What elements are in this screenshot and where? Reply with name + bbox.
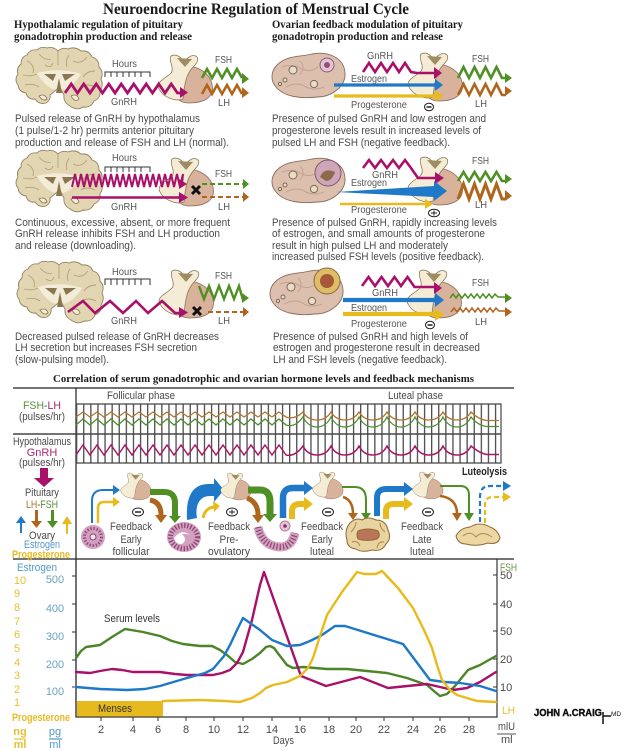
FSH dashed arrow bbox=[202, 179, 249, 189]
panel: normal GnRH pulse bbox=[16, 47, 249, 109]
FSH pulses bbox=[458, 67, 512, 83]
arrow: progesterone bbox=[203, 507, 214, 518]
day axis labels: 4 bbox=[130, 724, 136, 736]
day axis labels: 18 bbox=[323, 724, 335, 736]
text: high levels: estrogen and progesterone result in decreased bbox=[273, 342, 480, 354]
day axis labels: 24 bbox=[407, 724, 419, 736]
left labels: hormone flow: Estrogen bbox=[24, 539, 60, 551]
progesterone arrow bbox=[343, 308, 444, 321]
day axis labels: 20 bbox=[350, 724, 362, 736]
minus sign bbox=[132, 508, 144, 516]
arrow: LH bbox=[247, 498, 258, 515]
icon: corpus albicans bbox=[456, 524, 500, 545]
panel: continuous GnRH: GnRH bbox=[111, 201, 137, 213]
icon: ovary with follicle bbox=[272, 53, 345, 98]
FSH pulse arrow bbox=[202, 69, 249, 84]
text: continuous bbox=[15, 217, 230, 252]
left axis labels: 8 bbox=[14, 602, 20, 614]
left axis labels: 7 bbox=[14, 616, 20, 628]
day axis labels: 14 bbox=[266, 724, 278, 736]
left axis labels: 1 bbox=[14, 697, 20, 709]
panel: positive feedback: LH bbox=[475, 199, 487, 211]
early follicular phase group: follicular bbox=[112, 546, 150, 558]
progesterone arrow bbox=[340, 199, 433, 209]
text: pulsed release: production and release of FSH and LH (normal). bbox=[15, 137, 229, 149]
day axis labels: 22 bbox=[378, 724, 390, 736]
arrow: FSH bbox=[342, 487, 366, 514]
heading: hypothalamic regulation bbox=[14, 17, 193, 43]
preovulatory phase group bbox=[187, 473, 295, 558]
panel: positive feedback bbox=[272, 155, 512, 217]
panel: slow GnRH pulse: FSH bbox=[215, 270, 232, 282]
icon: brain bbox=[16, 47, 102, 109]
arrow: progesterone bbox=[292, 504, 304, 519]
left labels: hormone flow: Pituitary bbox=[25, 487, 59, 499]
icon: brain bbox=[17, 261, 103, 323]
LH pulses bbox=[458, 84, 512, 96]
panel: continuous GnRH: LH bbox=[218, 201, 230, 213]
arrow: progesterone bbox=[386, 504, 404, 519]
right axis labels: 50 bbox=[500, 626, 512, 638]
text: pulsed release: Pulsed release of GnRH by hypothalamus bbox=[15, 113, 200, 125]
LH pulse arrow bbox=[202, 85, 249, 98]
panel: negative feedback high levels: Progesterone bbox=[351, 318, 407, 330]
GnRH pulses trace bbox=[76, 445, 499, 455]
early follicular phase group: Early bbox=[120, 534, 142, 546]
hours scale: Hours bbox=[112, 58, 137, 70]
panel: continuous GnRH bbox=[16, 150, 249, 213]
icon: pituitary bbox=[408, 53, 462, 101]
LH pulses trace bbox=[76, 412, 499, 420]
panel: positive feedback: GnRH bbox=[372, 169, 398, 181]
FSH reduced pulses bbox=[450, 293, 512, 303]
hours scale bbox=[105, 266, 150, 285]
estrogen arrow bbox=[343, 293, 444, 307]
serum levels chart: Serum levels bbox=[104, 613, 160, 625]
panel: positive feedback: Estrogen bbox=[351, 177, 387, 189]
panel: normal GnRH pulse: GnRH bbox=[111, 96, 137, 108]
left axis labels: 500 bbox=[46, 574, 64, 586]
panel: negative feedback low levels bbox=[272, 50, 512, 111]
FSH increased arrow bbox=[199, 286, 249, 303]
right axis labels: mlU bbox=[498, 721, 515, 733]
text: continuous: and release (downloading). bbox=[15, 240, 136, 252]
minus sign bbox=[422, 508, 434, 516]
arrow: FSH to ovary bbox=[150, 492, 175, 516]
right axis labels: 40 bbox=[500, 599, 512, 611]
text: high levels bbox=[273, 331, 480, 366]
left axis labels: 4 bbox=[14, 657, 20, 669]
text: high levels: LH and FSH levels (negative feedback). bbox=[273, 354, 447, 366]
panel: slow GnRH pulse: GnRH bbox=[111, 315, 137, 327]
LH dashed arrow bbox=[202, 192, 249, 202]
left labels: hormone flow: Ovary bbox=[29, 530, 55, 542]
early luteal phase group: luteal bbox=[310, 546, 334, 558]
left axis labels: pg bbox=[49, 726, 61, 738]
late luteal phase group bbox=[377, 466, 511, 558]
panel: negative feedback high levels: Estrogen bbox=[351, 302, 387, 314]
left axis labels: 300 bbox=[46, 631, 64, 643]
signature bbox=[534, 708, 621, 724]
left axis labels: Estrogen bbox=[17, 562, 57, 574]
late luteal phase group: Feedback bbox=[401, 521, 443, 533]
progesterone arrow bbox=[334, 90, 443, 102]
panel: negative feedback low levels: Estrogen bbox=[351, 73, 387, 85]
menses bar: Menses bbox=[98, 703, 132, 715]
day axis labels: 10 bbox=[208, 724, 220, 736]
arrow: estrogen surge bbox=[187, 478, 224, 520]
icon: pituitary bbox=[121, 473, 151, 500]
arrow: estrogen bbox=[16, 516, 26, 533]
menses bar bbox=[77, 701, 163, 716]
heading: hypothalamic regulation: gonadotrophin production and release bbox=[14, 29, 193, 43]
day axis labels: 26 bbox=[434, 724, 446, 736]
arrow: dashed estrogen bbox=[480, 486, 504, 522]
right axis labels: LH bbox=[502, 705, 515, 717]
hours scale: Hours bbox=[112, 266, 137, 278]
panel: negative feedback low levels: LH bbox=[475, 98, 487, 110]
curve: estrogen bbox=[76, 618, 496, 691]
arrow: LH bbox=[31, 510, 42, 528]
left axis labels: 3 bbox=[14, 670, 20, 682]
right axis labels: 50 bbox=[500, 570, 512, 582]
panel: normal GnRH pulse: FSH bbox=[215, 54, 232, 66]
hours scale bbox=[105, 152, 150, 172]
arrow: progesterone bbox=[62, 516, 72, 534]
icon: ruptured follicle bbox=[258, 521, 295, 547]
pulse grid chart bbox=[76, 404, 502, 463]
FSH pulses trace bbox=[76, 417, 499, 427]
text: decreased pulsed: (slow-pulsing model). bbox=[15, 354, 109, 366]
early follicular phase group: Feedback bbox=[110, 521, 152, 533]
text: low levels: progesterone levels result in increased levels of bbox=[272, 125, 482, 137]
day axis labels: 12 bbox=[237, 724, 249, 736]
left axis labels: 200 bbox=[46, 659, 64, 671]
left labels: pulse rows: (pulses/hr) bbox=[19, 457, 65, 469]
title: Neuroendocrine Regulation of Menstrual Cycle bbox=[103, 1, 409, 18]
left labels: hormone flow: LH-FSH bbox=[26, 499, 58, 511]
icon: brain bbox=[16, 150, 102, 212]
left axis labels: 5 bbox=[14, 643, 20, 655]
icon: primary follicle bbox=[81, 525, 105, 549]
early luteal phase group: Early bbox=[312, 534, 333, 546]
left axis labels: 100 bbox=[46, 686, 64, 698]
heading: ovarian feedback: gonadotropin production and release bbox=[272, 29, 444, 43]
minus sign bbox=[426, 321, 434, 329]
arrow: LH bbox=[343, 497, 353, 514]
phase labels: Luteal phase bbox=[388, 390, 443, 402]
hours scale: Hours bbox=[112, 152, 137, 164]
left labels: pulse rows: Hypothalamus bbox=[13, 436, 71, 448]
late luteal phase group: Late bbox=[412, 534, 432, 546]
icon: ovary with large follicle bbox=[272, 158, 345, 203]
text: continuous: Continuous, excessive, absent, or more frequent bbox=[15, 217, 230, 229]
icon: pituitary bbox=[159, 158, 213, 206]
right axis labels: 20 bbox=[500, 654, 512, 666]
left axis labels: 10 bbox=[14, 575, 26, 587]
left labels: hormone flow bbox=[12, 468, 72, 561]
day axis labels: 28 bbox=[463, 724, 475, 736]
text: decreased pulsed: Decreased pulsed release of GnRH decreases bbox=[15, 331, 219, 343]
curve: progesterone bbox=[163, 571, 496, 702]
text: high levels: Presence of pulsed GnRH and high levels of bbox=[273, 331, 469, 343]
heading: hypothalamic regulation: Hypothalamic regulation of pituitary bbox=[14, 17, 183, 31]
right axis labels bbox=[497, 562, 517, 746]
text: rapid increase bbox=[272, 217, 497, 263]
early luteal phase group bbox=[283, 472, 390, 558]
panel: slow GnRH pulse bbox=[17, 261, 249, 327]
text: rapid increase: increased pulsed FSH levels (positive feedback). bbox=[272, 251, 484, 263]
left labels: pulse rows: GnRH bbox=[27, 447, 57, 459]
arrow: LH to ovary bbox=[150, 500, 161, 515]
text: pulsed release bbox=[15, 113, 229, 149]
arrow: estrogen to pituitary bbox=[92, 490, 114, 523]
right axis labels: FSH bbox=[500, 562, 517, 574]
blocked mark bbox=[193, 307, 201, 315]
day axis labels bbox=[98, 724, 475, 747]
panel: negative feedback high levels bbox=[270, 268, 512, 330]
left axis labels bbox=[12, 562, 70, 750]
late luteal phase group: luteal bbox=[410, 546, 434, 558]
LH dashed arrow bbox=[208, 307, 249, 317]
day axis labels: 8 bbox=[183, 724, 189, 736]
phase labels bbox=[107, 390, 443, 402]
arrow: GnRH to pituitary bbox=[34, 468, 54, 487]
text: low levels bbox=[272, 113, 486, 149]
continuous GnRH arrows bbox=[72, 174, 188, 203]
arrow: FSH bbox=[47, 510, 58, 528]
arrow: estrogen bbox=[283, 488, 304, 518]
late luteal phase group: Luteolysis bbox=[462, 466, 507, 478]
arrow: LH bbox=[440, 496, 457, 514]
arrow: estrogen bbox=[377, 489, 404, 516]
text: decreased pulsed: LH secretion but increases FSH secretion bbox=[15, 342, 197, 354]
hours scale bbox=[105, 58, 150, 77]
text: rapid increase: Presence of pulsed GnRH, rapidly increasing levels bbox=[272, 217, 497, 229]
curve: LH pulse bbox=[76, 572, 496, 690]
heading: ovarian feedback bbox=[272, 17, 463, 43]
curve: FSH bbox=[76, 629, 496, 696]
day axis labels: 16 bbox=[294, 724, 306, 736]
LH surge pulses bbox=[458, 184, 512, 201]
panel: positive feedback: FSH bbox=[472, 155, 489, 167]
left labels: pulse rows: (pulses/hr) bbox=[19, 411, 65, 423]
left labels: hormone flow: Progesterone bbox=[12, 549, 70, 561]
left labels: pulse rows bbox=[13, 400, 71, 469]
arrow: FSH bbox=[440, 486, 469, 514]
estrogen arrow bbox=[334, 79, 443, 91]
estrogen surge arrow bbox=[336, 181, 447, 201]
day axis labels: 2 bbox=[98, 724, 104, 736]
minus sign bbox=[322, 508, 334, 516]
text: rapid increase: of estrogen, and small amounts of progesterone bbox=[272, 228, 485, 240]
preovulatory phase group: Pre- bbox=[220, 534, 239, 546]
left axis labels: 9 bbox=[14, 588, 20, 600]
GnRH pulse arrow bbox=[65, 84, 188, 98]
left axis labels: 2 bbox=[14, 684, 20, 696]
icon: pituitary bbox=[413, 472, 443, 499]
plus sign bbox=[428, 209, 440, 217]
left axis labels: Progesterone bbox=[12, 712, 70, 724]
icon: pituitary bbox=[407, 270, 461, 318]
panel: negative feedback high levels: FSH bbox=[472, 277, 489, 289]
heading: correlation: Correlation of serum gonadotrophic and ovarian hormone levels and feedback mechanisms bbox=[53, 373, 475, 385]
arrow: dashed progesterone bbox=[485, 497, 504, 523]
text: low levels: Presence of pulsed GnRH and low estrogen and bbox=[272, 113, 486, 125]
text: decreased pulsed bbox=[15, 331, 219, 366]
icon: corpus luteum bbox=[346, 518, 390, 551]
early follicular phase group bbox=[81, 473, 201, 558]
panel: negative feedback low levels: FSH bbox=[472, 53, 489, 65]
panel: normal GnRH pulse: LH bbox=[218, 97, 230, 109]
icon: pituitary bbox=[159, 270, 213, 318]
arrow: FSH bbox=[248, 490, 270, 514]
icon: pituitary bbox=[221, 473, 251, 500]
blocked mark bbox=[192, 186, 200, 194]
day axis labels: 6 bbox=[155, 724, 161, 736]
icon: ovary with corpus luteum bbox=[270, 268, 343, 315]
FSH pulses bbox=[458, 172, 512, 184]
right axis labels: 10 bbox=[500, 682, 512, 694]
left labels: pulse rows: FSH-LH bbox=[23, 400, 61, 412]
GnRH pulses bbox=[362, 277, 442, 294]
right axis labels: ml bbox=[501, 734, 513, 746]
preovulatory phase group: ovulatory bbox=[208, 546, 250, 558]
arrow: progesterone to pituitary bbox=[98, 502, 114, 523]
text: continuous: GnRH release inhibits FSH and LH production bbox=[15, 228, 220, 240]
panel: positive feedback: Progesterone bbox=[351, 204, 407, 216]
signature: JOHN A.CRAIG bbox=[534, 708, 602, 719]
feedback row bbox=[81, 466, 511, 558]
icon: pituitary bbox=[313, 472, 343, 499]
panel: negative feedback high levels: GnRH bbox=[372, 287, 398, 299]
serum levels chart bbox=[72, 559, 497, 721]
GnRH pulses bbox=[363, 160, 444, 184]
left axis labels: 6 bbox=[14, 629, 20, 641]
text: low levels: pulsed LH and FSH (negative feedback). bbox=[272, 137, 450, 149]
LH reduced pulses bbox=[451, 307, 512, 317]
slow GnRH arrow bbox=[68, 301, 188, 318]
left axis labels: 400 bbox=[46, 603, 64, 615]
GnRH pulses bbox=[363, 63, 442, 79]
icon: pituitary bbox=[408, 157, 462, 205]
plus sign bbox=[226, 508, 238, 516]
text: pulsed release: (1 pulse/1-2 hr) permits anterior pituitary bbox=[15, 125, 194, 137]
phase labels: Follicular phase bbox=[107, 390, 175, 402]
signature: MD bbox=[611, 711, 621, 718]
minus sign bbox=[424, 103, 434, 111]
panel: negative feedback low levels: GnRH bbox=[367, 50, 393, 62]
panel: negative feedback high levels: LH bbox=[475, 316, 487, 328]
panel: continuous GnRH: FSH bbox=[215, 168, 232, 180]
icon: growing follicle bbox=[167, 522, 201, 552]
text: rapid increase: result in high pulsed LH and moderately bbox=[272, 240, 448, 252]
panel: slow GnRH pulse: LH bbox=[218, 315, 230, 327]
heading: ovarian feedback: Ovarian feedback modulation of pituitary bbox=[272, 17, 463, 31]
day axis labels: Days bbox=[273, 735, 294, 747]
left axis labels: ng bbox=[13, 726, 27, 738]
icon: pituitary bbox=[158, 55, 212, 103]
panel: negative feedback low levels: Progesterone bbox=[351, 99, 407, 111]
preovulatory phase group: Feedback bbox=[208, 521, 250, 533]
early luteal phase group: Feedback bbox=[301, 521, 343, 533]
